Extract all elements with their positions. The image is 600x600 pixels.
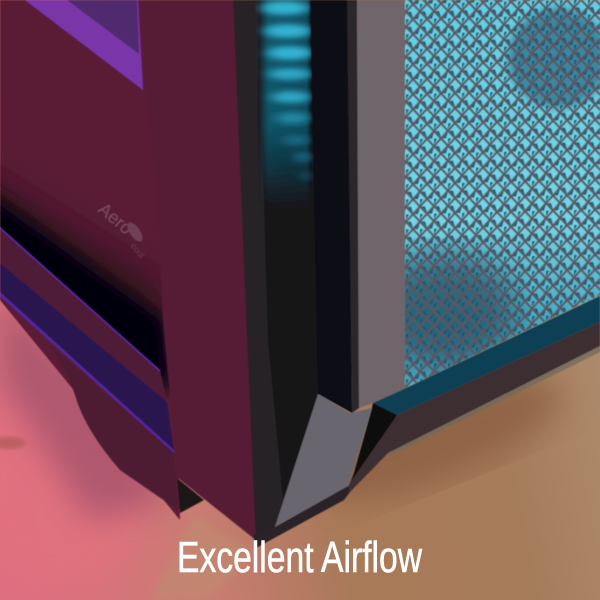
lower chassis rail <box>0 227 167 402</box>
black front strip <box>233 0 320 548</box>
teal bottom strip <box>373 296 600 415</box>
brand logo: cool <box>128 241 147 260</box>
side window <box>25 0 143 90</box>
grey foot facet <box>275 394 372 527</box>
foot <box>177 478 204 513</box>
brand logo: Aero <box>94 199 136 239</box>
front column <box>140 0 257 541</box>
dark blue rail <box>0 263 174 450</box>
bottom shadow <box>0 160 170 330</box>
mesh panel <box>404 0 600 388</box>
vent slit <box>310 0 352 413</box>
grey front panel <box>357 0 406 408</box>
bottom corner trim <box>253 486 350 548</box>
lower front frame <box>348 322 600 492</box>
case side panel <box>0 0 180 520</box>
fan shadow <box>508 8 600 108</box>
brand logo <box>94 199 147 260</box>
blue glow <box>258 0 313 210</box>
heading: Excellent Airflow: Excellent Airflow <box>177 533 422 582</box>
lower case base <box>45 340 178 510</box>
black wedge <box>352 403 397 480</box>
